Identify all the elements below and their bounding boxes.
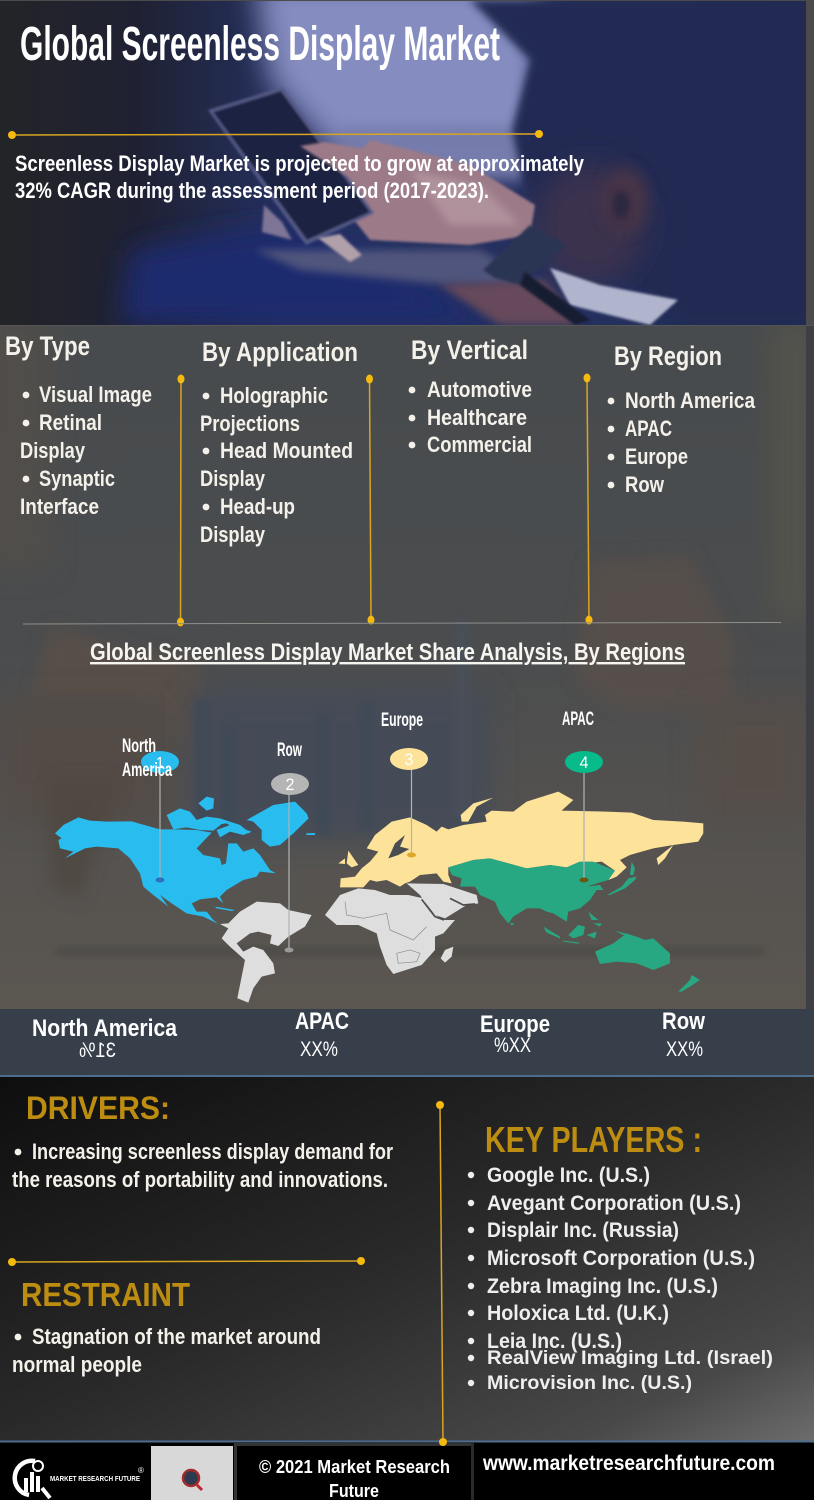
logo: market research future: MARKET RESEARCH FUTURE — [50, 1474, 140, 1483]
panel: hero title and summary — [8, 18, 585, 203]
south america — [220, 902, 312, 1003]
list: region items: APAC — [625, 416, 672, 441]
list: region items — [608, 388, 756, 497]
pin: europe: Europe — [381, 710, 423, 731]
stat: apac — [295, 1008, 349, 1061]
text: website: www.marketresearchfuture.com — [482, 1452, 775, 1475]
connector: horizontal gold divider — [8, 1257, 365, 1266]
list: key players: Holoxica Ltd. (U.K.) — [487, 1302, 669, 1325]
region: asia pacific — [448, 858, 700, 992]
panel: by vertical — [409, 335, 532, 457]
pin: row: Row — [277, 740, 302, 761]
text: restraint bullet: normal people — [12, 1352, 142, 1377]
connector: vertical gold divider — [436, 1101, 444, 1442]
panel: regional stats band — [0, 1008, 814, 1077]
list: vertical items: Commercial — [427, 432, 532, 457]
heading: drivers: DRIVERS: — [26, 1090, 170, 1126]
list: application items: Display — [200, 522, 266, 547]
list: type items: Interface — [20, 494, 99, 519]
list: type items: Display — [20, 438, 86, 463]
map pins and labels — [122, 709, 603, 952]
list: key players: Displair Inc. (Russia) — [487, 1219, 679, 1242]
panel: segments and map background — [0, 320, 814, 1009]
stat: apac: APAC — [295, 1008, 349, 1035]
stat: north america — [32, 1015, 178, 1062]
text: restraint bullet: Stagnation of the market around — [32, 1324, 321, 1349]
text: copyright — [259, 1457, 450, 1500]
heading: by region: By Region — [614, 341, 722, 371]
pin: north america: North — [122, 736, 156, 757]
stat: apac: XX% — [300, 1038, 338, 1061]
list: type items — [20, 382, 152, 519]
region: rest of world — [220, 883, 478, 1003]
panel: drivers — [12, 1090, 393, 1192]
heading: key players: KEY PLAYERS : — [485, 1119, 702, 1160]
logo: market research future: ® — [138, 1466, 144, 1475]
list: application items: Projections — [200, 411, 300, 436]
list: application items: Display — [200, 466, 266, 491]
panel: key players — [468, 1119, 773, 1394]
list: vertical items: Healthcare — [427, 405, 527, 430]
list: key players: Zebra Imaging Inc. (U.S.) — [487, 1275, 718, 1298]
world map — [55, 792, 703, 1003]
heading: by application: By Application — [202, 337, 358, 367]
panel: drivers, restraint and key players background — [0, 1077, 814, 1441]
text: copyright: © 2021 Market Research — [259, 1457, 450, 1477]
list: key players: Avegant Corporation (U.S.) — [487, 1192, 741, 1215]
pin: north america: America — [122, 760, 172, 781]
stat: europe: %XX — [494, 1034, 531, 1057]
list: key players: RealView Imaging Ltd. (Israel) — [487, 1348, 773, 1369]
logo: market research future — [15, 1461, 144, 1498]
stat: row — [662, 1008, 705, 1061]
list: application items: Holographic — [220, 383, 328, 408]
list: application items: Head Mounted — [220, 438, 353, 463]
text: restraint bullet — [12, 1324, 321, 1377]
divider connectors between segments — [177, 374, 592, 626]
heading: by vertical: By Vertical — [411, 335, 528, 365]
text: drivers bullet — [12, 1139, 393, 1192]
stat: row: Row — [662, 1008, 705, 1035]
text: hero summary: Screenless Display Market is projected to grow at approximately — [15, 151, 585, 176]
list: region items: North America — [625, 388, 756, 413]
text: hero summary: 32% CAGR during the assessment period (2017-2023). — [15, 178, 489, 203]
list: key players: Microsoft Corporation (U.S.) — [487, 1247, 755, 1270]
list: region items: Europe — [625, 444, 688, 469]
text: drivers bullet: the reasons of portability and innovations. — [12, 1167, 388, 1192]
connector: hero gold line — [8, 130, 543, 139]
list: key players: Google Inc. (U.S.) — [487, 1164, 650, 1187]
stat: north america: 31% — [79, 1039, 116, 1062]
pin: apac: APAC — [562, 709, 594, 730]
panel: by region — [608, 341, 756, 497]
gold connector end dot — [439, 1438, 447, 1446]
list: application items — [200, 383, 353, 547]
stat: europe — [480, 1011, 550, 1057]
stat: north america: North America — [32, 1015, 178, 1042]
panel: hero photo background — [0, 0, 814, 330]
list: type items: Synaptic — [39, 466, 115, 491]
list: region items: Row — [625, 472, 665, 497]
list: vertical items: Automotive — [427, 377, 532, 402]
list: application items: Head-up — [220, 494, 295, 519]
hero bottom edge — [0, 325, 814, 327]
pin: apac — [562, 709, 603, 882]
heading: restraint: RESTRAINT — [21, 1276, 190, 1313]
panel: by application — [200, 337, 358, 547]
africa and middle east — [325, 883, 478, 974]
pin: europe: 3 — [404, 750, 414, 769]
list: type items: Visual Image — [39, 382, 152, 407]
pin: apac: 4 — [580, 753, 588, 772]
panel: by type — [5, 331, 152, 519]
region: europe and russia — [338, 792, 703, 887]
list: type items: Retinal — [39, 410, 102, 435]
panel: footer — [0, 1438, 814, 1500]
list: key players: Microvision Inc. (U.S.) — [487, 1373, 692, 1394]
stat: europe: Europe — [480, 1011, 550, 1038]
panel: restraint — [12, 1276, 321, 1377]
stat: row: XX% — [666, 1038, 703, 1061]
text: drivers bullet: Increasing screenless display demand for — [32, 1139, 393, 1164]
title: Global Screenless Display Market — [20, 18, 500, 71]
pin: row: 2 — [286, 775, 294, 794]
text: hero summary — [15, 151, 585, 203]
logo: small icon on grey tile — [151, 1446, 233, 1500]
list: key players — [468, 1164, 773, 1394]
list: vertical items — [409, 377, 532, 457]
region: north america — [55, 797, 315, 924]
heading: by type: By Type — [5, 331, 90, 361]
pin: row — [271, 740, 309, 952]
pin: north america: 1 — [156, 755, 164, 772]
pin: north america — [122, 736, 179, 882]
pin: europe — [381, 710, 428, 858]
heading: market share analysis: Global Screenless Display Market Share Analysis, By Regions — [90, 639, 685, 666]
list: key players: Leia Inc. (U.S.) — [487, 1330, 622, 1353]
